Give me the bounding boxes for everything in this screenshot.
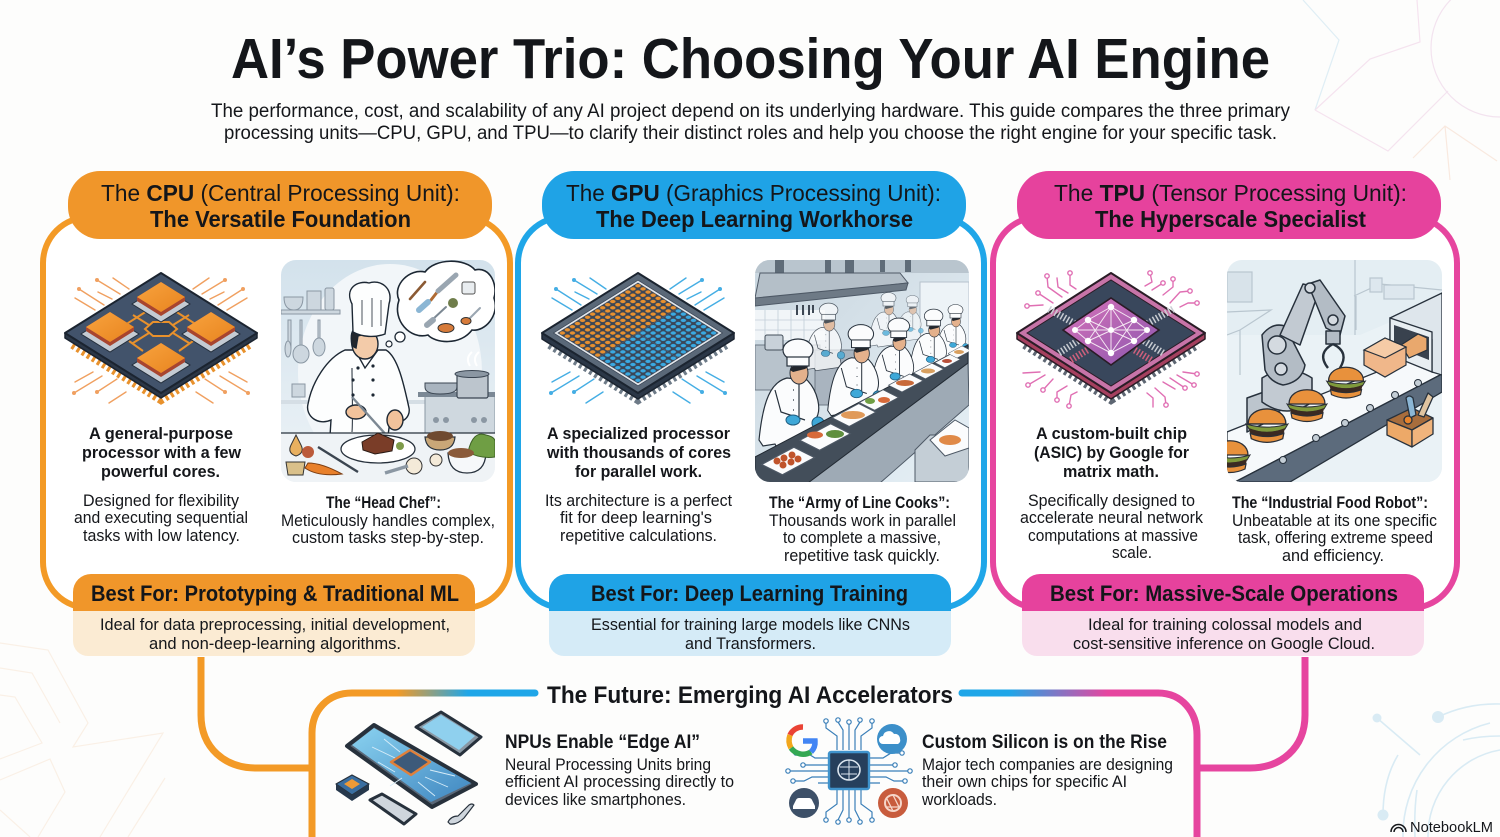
illustration: army of line cooks — [755, 260, 971, 483]
CPU description bold: processor with a few — [82, 443, 242, 462]
future heading: The Future: Emerging AI Accelerators — [547, 682, 953, 709]
TPU header pill: The TPU (Tensor Processing Unit): — [1054, 180, 1407, 206]
custom silicon text block: Custom Silicon is on the Rise — [922, 732, 1167, 753]
conveyor — [1227, 362, 1440, 482]
GPU analogy caption: The “Army of Line Cooks”: — [769, 494, 950, 512]
TPU analogy caption: task, offering extreme speed — [1238, 529, 1433, 547]
icon: CPU chip with four cores — [65, 273, 257, 403]
CPU best-for callout — [73, 574, 475, 656]
icon: TPU chip with neural network — [1017, 271, 1205, 408]
connector: TPU to future panel — [1197, 657, 1305, 768]
CPU description bold: powerful cores. — [101, 462, 220, 481]
CPU description — [74, 492, 248, 545]
CPU header pill: The CPU (Central Processing Unit): — [101, 180, 460, 206]
GPU best-for callout: Best For: Deep Learning Training — [591, 581, 908, 606]
CPU best-for callout: and non-deep-learning algorithms. — [149, 635, 401, 653]
TPU description: scale. — [1112, 544, 1152, 562]
TPU analogy caption: and efficiency. — [1282, 547, 1384, 565]
subtitle: The performance, cost, and scalability of any AI project depend on its underlying hardware. This guide compares the three primary — [211, 101, 1290, 122]
NPU text block: Neural Processing Units bring — [505, 756, 711, 774]
TPU best-for callout: Best For: Massive-Scale Operations — [1050, 581, 1398, 606]
open box — [1387, 393, 1433, 447]
custom silicon text block — [921, 732, 1173, 809]
NPU text block: efficient AI processing directly to — [505, 773, 734, 791]
counter with plated dish — [329, 434, 389, 437]
TPU description: accelerate neural network — [1020, 509, 1204, 527]
TPU description: Specifically designed to — [1028, 492, 1195, 510]
CPU best-for callout: Ideal for data preprocessing, initial development, — [100, 616, 450, 634]
title: AI’s Power Trio: Choosing Your AI Engine — [231, 27, 1270, 91]
CPU analogy caption: custom tasks step-by-step. — [292, 529, 484, 547]
TPU analogy caption: Unbeatable at its one specific — [1232, 512, 1437, 530]
CPU analogy caption: The “Head Chef”: — [326, 494, 441, 512]
robot arm — [1247, 280, 1345, 432]
panel: CPU — [43, 171, 510, 656]
CPU best-for callout: Best For: Prototyping & Traditional ML — [91, 581, 459, 606]
custom silicon text block: their own chips for specific AI — [922, 773, 1127, 791]
subtitle: processing units—CPU, GPU, and TPU—to clarify their distinct roles and help you choose the right engine for your specific task. — [224, 123, 1277, 144]
TPU header pill — [1017, 171, 1441, 239]
TPU header pill: The Hyperscale Specialist — [1095, 206, 1366, 232]
illustration: industrial food robot — [1210, 260, 1442, 482]
GPU description: repetitive calculations. — [560, 527, 717, 545]
CPU description: Designed for flexibility — [83, 492, 240, 510]
GPU description — [545, 492, 732, 545]
GPU analogy caption: Thousands work in parallel — [769, 512, 956, 530]
GPU best-for callout — [549, 574, 951, 656]
panel: GPU — [518, 171, 984, 656]
boxes — [1364, 334, 1427, 377]
NPU text block: NPUs Enable “Edge AI” — [505, 732, 700, 753]
icon: NPU smartphone and devices — [336, 712, 481, 824]
connector: CPU to future panel — [201, 657, 312, 768]
TPU description bold: A custom-built chip — [1036, 424, 1187, 443]
custom silicon text block: Major tech companies are designing — [922, 756, 1173, 774]
CPU description: and executing sequential — [74, 509, 248, 527]
GPU description bold: with thousands of cores — [546, 443, 731, 462]
GPU description bold — [546, 424, 731, 481]
CPU header pill: The Versatile Foundation — [150, 206, 411, 232]
GPU analogy caption: to complete a massive, — [783, 529, 941, 547]
TPU description: computations at massive — [1028, 527, 1198, 545]
CPU description bold: A general-purpose — [89, 424, 233, 443]
subtitle — [211, 101, 1290, 144]
NotebookLM logo: NotebookLM — [1410, 819, 1493, 836]
panel: TPU — [993, 171, 1457, 656]
TPU description bold — [1034, 424, 1189, 481]
NPU text block: devices like smartphones. — [505, 791, 686, 809]
illustration: head chef — [281, 260, 495, 483]
TPU best-for callout — [1022, 574, 1424, 656]
TPU best-for callout: cost-sensitive inference on Google Cloud. — [1073, 635, 1375, 653]
chef figure — [308, 282, 409, 437]
GPU analogy caption — [769, 494, 956, 565]
CPU description bold — [82, 424, 242, 481]
NPU text block — [505, 732, 734, 809]
icon: custom silicon chip with company logos — [786, 718, 912, 824]
CPU analogy caption — [281, 494, 495, 547]
TPU analogy caption: The “Industrial Food Robot”: — [1232, 494, 1428, 512]
CPU header pill — [68, 171, 492, 239]
CPU analogy caption: Meticulously handles complex, — [281, 512, 495, 530]
GPU description bold: A specialized processor — [547, 424, 730, 443]
TPU analogy caption — [1232, 494, 1437, 565]
icon: GPU chip with many cores — [542, 273, 734, 403]
tunnel — [1390, 293, 1442, 375]
GPU analogy caption: repetitive task quickly. — [784, 547, 940, 565]
TPU best-for callout: Ideal for training colossal models and — [1088, 616, 1362, 634]
TPU description — [1020, 492, 1204, 562]
custom silicon text block: workloads. — [921, 791, 997, 809]
GPU description: Its architecture is a perfect — [545, 492, 732, 510]
GPU best-for callout: Essential for training large models like CNNs — [591, 616, 910, 634]
TPU description bold: matrix math. — [1063, 462, 1159, 481]
thought bubble — [386, 261, 495, 347]
GPU description: fit for deep learning's — [560, 509, 712, 527]
CPU description: tasks with low latency. — [83, 527, 240, 545]
TPU description bold: (ASIC) by Google for — [1034, 443, 1189, 462]
GPU best-for callout: and Transformers. — [685, 635, 816, 653]
GPU header pill: The GPU (Graphics Processing Unit): — [566, 180, 941, 206]
GPU header pill — [542, 171, 966, 239]
GPU header pill: The Deep Learning Workhorse — [596, 206, 913, 232]
panel: future accelerators — [312, 682, 1197, 837]
GPU description bold: for parallel work. — [575, 462, 702, 481]
